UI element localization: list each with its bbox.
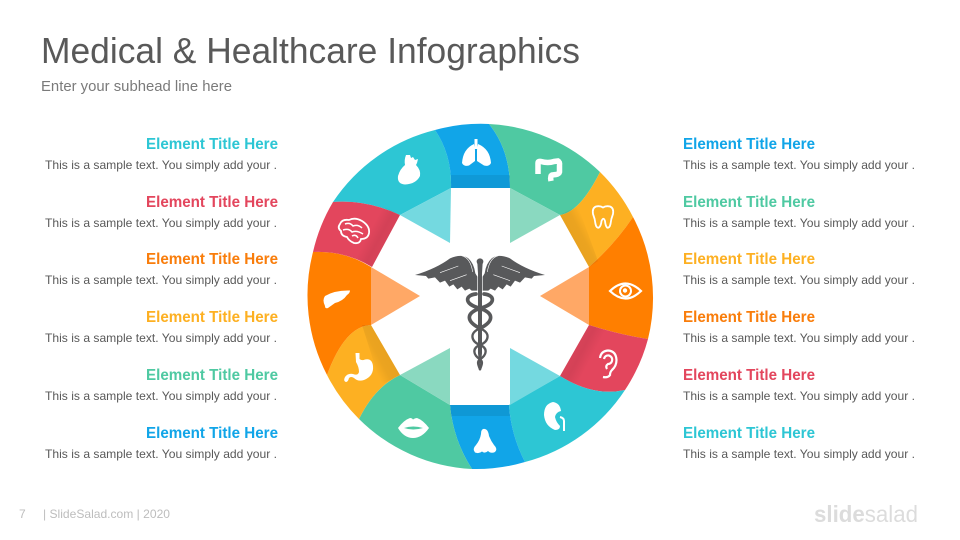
fold triangle: top left (400, 188, 451, 243)
left item 6: This is a sample text. You simply add your . (45, 447, 277, 461)
left item 6: Element Title Here (146, 425, 278, 442)
icon: colon (538, 161, 560, 181)
snakes (468, 294, 492, 369)
left item 3: Element Title Here (146, 251, 278, 268)
fold triangle: right (540, 267, 589, 325)
left item 5: This is a sample text. You simply add your . (45, 389, 277, 403)
left item 5: Element Title Here (146, 367, 278, 384)
fold triangle: bottom right (510, 348, 560, 405)
right text column (683, 136, 915, 461)
segment: nose blue (450, 405, 525, 469)
right item 2: Element Title Here (683, 194, 815, 211)
right item 4: Element Title Here (683, 309, 815, 326)
segment: brain red (313, 202, 400, 267)
icon: lips (398, 418, 429, 438)
left item 4: Element Title Here (146, 309, 278, 326)
left item 3 (45, 251, 278, 287)
left item 4 (45, 309, 278, 345)
segment: stomach yellow (327, 325, 400, 419)
title: Medical & Healthcare Infographics (41, 30, 580, 71)
left item 2: This is a sample text. You simply add your . (45, 216, 277, 230)
icon: liver (324, 290, 350, 308)
segment: kidney teal (509, 376, 625, 462)
left item 4: This is a sample text. You simply add your . (45, 331, 277, 345)
fold triangle: left (371, 267, 420, 325)
right item 5: This is a sample text. You simply add your . (683, 389, 915, 403)
right item 2: This is a sample text. You simply add your . (683, 216, 915, 230)
segment: ear red (560, 325, 648, 392)
right wing (483, 256, 545, 291)
right item 3 (683, 251, 915, 287)
left item 2 (45, 194, 278, 230)
circular diagram (307, 124, 653, 469)
right item 3: This is a sample text. You simply add your . (683, 273, 915, 287)
segment: heart teal (333, 130, 451, 215)
left item 6 (45, 425, 278, 461)
left item 1 (45, 136, 278, 172)
icon: ear (600, 350, 616, 377)
icon: tooth (593, 206, 613, 228)
icon: eye (610, 284, 641, 298)
right item 6 (683, 425, 915, 461)
icon: brain (339, 219, 369, 243)
segment: eye orange (589, 217, 653, 339)
right item 4 (683, 309, 915, 345)
segment: colon green (489, 124, 600, 215)
right item 5 (683, 367, 915, 403)
left text column (45, 136, 278, 461)
segment: lips green (359, 375, 472, 469)
segment: tooth yellow (560, 172, 633, 267)
staff (477, 258, 483, 368)
right item 6: Element Title Here (683, 425, 815, 442)
segment: liver orange (307, 252, 371, 375)
icon: caduceus (415, 256, 545, 369)
left item 5 (45, 367, 278, 403)
right item 1 (683, 136, 915, 172)
subhead: Enter your subhead line here (41, 78, 232, 95)
logo: slidesalad (814, 501, 918, 527)
icon: heart (398, 155, 420, 184)
fold triangle: bottom left (400, 348, 450, 405)
icon: kidney (544, 402, 564, 431)
right item 3: Element Title Here (683, 251, 815, 268)
segment: lungs blue (435, 124, 510, 188)
left item 3: This is a sample text. You simply add your . (45, 273, 277, 287)
right item 2 (683, 194, 915, 230)
right item 1: This is a sample text. You simply add your . (683, 158, 915, 172)
right item 5: Element Title Here (683, 367, 815, 384)
left item 2: Element Title Here (146, 194, 278, 211)
segment shading bands (352, 175, 608, 416)
right item 1: Element Title Here (683, 136, 815, 153)
footer credit: | SlideSalad.com | 2020 (43, 507, 170, 521)
footer page number: 7 (19, 507, 26, 521)
right item 6: This is a sample text. You simply add your . (683, 447, 915, 461)
icon: lungs (462, 139, 491, 166)
icon: stomach (344, 353, 373, 382)
fold triangle: top right (510, 188, 560, 243)
right item 4: This is a sample text. You simply add your . (683, 331, 915, 345)
icon: nose (474, 429, 496, 453)
left wing (415, 256, 477, 291)
left item 1: This is a sample text. You simply add your . (45, 158, 277, 172)
left item 1: Element Title Here (146, 136, 278, 153)
